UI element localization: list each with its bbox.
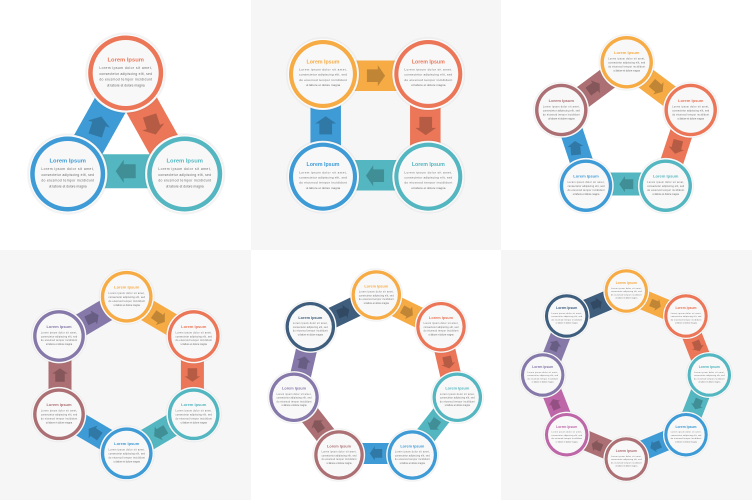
circle: navy xyxy=(284,300,337,353)
circle: purple: do eiusmod tempor incididunt xyxy=(277,400,312,403)
circle: magenta: consectetur adipiscing elit, sed xyxy=(551,434,582,437)
circle: red: Lorem Ipsum xyxy=(429,316,454,320)
circle: blue: ut labore et dolore magna xyxy=(400,462,426,465)
circle: red: Lorem Ipsum xyxy=(107,57,144,63)
circle: blue xyxy=(287,141,359,213)
circle: red: do eiusmod tempor incididunt xyxy=(671,318,702,321)
circle: blue xyxy=(386,429,439,481)
connector: blue xyxy=(61,413,127,452)
circle: mauve: Lorem ipsum dolor sit amet, xyxy=(543,105,580,108)
circle: red: ut labore et dolore magna xyxy=(107,83,145,87)
circle: navy: ut labore et dolore magna xyxy=(298,333,324,336)
circle: navy: do eiusmod tempor incididunt xyxy=(551,318,582,321)
circle: blue: do eiusmod tempor incididunt xyxy=(671,437,702,440)
circle: purple xyxy=(32,309,86,363)
circle: mauve: consectetur adipiscing elit, sed xyxy=(322,454,357,457)
circle: red: consectetur adipiscing elit, sed xyxy=(404,73,452,77)
circle: red: do eiusmod tempor incididunt xyxy=(176,339,212,342)
circle: teal: Lorem Ipsum xyxy=(412,162,445,168)
circle: orange: Lorem Ipsum xyxy=(614,50,640,55)
connector: purple xyxy=(295,328,312,397)
circle: orange: consectetur adipiscing elit, sed xyxy=(611,290,642,293)
circle: teal: do eiusmod tempor incididunt xyxy=(158,179,211,183)
circle: teal: Lorem Ipsum xyxy=(445,387,470,391)
circle: red: consectetur adipiscing elit, sed xyxy=(176,335,213,338)
circle: red xyxy=(663,82,718,138)
circle: red xyxy=(86,33,165,113)
circle: orange: ut labore et dolore magna xyxy=(364,302,390,305)
circle: teal xyxy=(145,134,224,214)
circle: mauve: Lorem Ipsum xyxy=(327,444,352,448)
circle: magenta: Lorem Ipsum xyxy=(556,425,577,429)
circle: teal: consectetur adipiscing elit, sed xyxy=(404,175,452,179)
circle: teal: Lorem ipsum dolor sit amet, xyxy=(440,393,475,396)
connector: red xyxy=(685,317,708,375)
connector: mauve xyxy=(568,433,626,457)
connector: red xyxy=(126,77,178,171)
circle: mauve: Lorem ipsum dolor sit amet, xyxy=(322,450,357,453)
circle: teal: do eiusmod tempor incididunt xyxy=(404,181,452,185)
circle: mauve: ut labore et dolore magna xyxy=(548,117,575,120)
circle: navy: Lorem Ipsum xyxy=(298,316,323,320)
circle: red: do eiusmod tempor incididunt xyxy=(99,78,152,82)
connector: purple xyxy=(545,317,568,375)
circle: red: Lorem ipsum dolor sit amet, xyxy=(424,322,459,325)
circle: mauve: Lorem Ipsum xyxy=(616,449,637,453)
circle: red: ut labore et dolore magna xyxy=(675,322,698,325)
circle: blue: Lorem ipsum dolor sit amet, xyxy=(41,167,94,171)
circle: purple: ut labore et dolore magna xyxy=(281,404,307,407)
circle: red: do eiusmod tempor incididunt xyxy=(424,330,459,333)
connector: teal xyxy=(74,160,178,183)
circle: mauve: do eiusmod tempor incididunt xyxy=(611,461,642,464)
circle: red: ut labore et dolore magna xyxy=(677,117,705,120)
circle: mauve xyxy=(313,429,365,481)
circle: orange: Lorem ipsum dolor sit amet, xyxy=(611,287,642,290)
circle: orange: Lorem Ipsum xyxy=(307,59,340,65)
circle: mauve: consectetur adipiscing elit, sed xyxy=(543,109,580,112)
connector: orange xyxy=(626,293,685,317)
circle: blue: consectetur adipiscing elit, sed xyxy=(568,185,605,188)
circle: blue: consectetur adipiscing elit, sed xyxy=(109,453,146,456)
connector: magenta xyxy=(545,375,568,433)
circle: blue: Lorem ipsum dolor sit amet, xyxy=(299,170,347,174)
connector: purple xyxy=(61,298,127,337)
connector: orange xyxy=(127,298,192,337)
circle: blue: consectetur adipiscing elit, sed xyxy=(671,434,701,437)
panel: seven-step cycle xyxy=(268,269,484,481)
circle: orange xyxy=(603,268,649,314)
circle: blue: do eiusmod tempor incididunt xyxy=(41,179,94,183)
circle: orange: consectetur adipiscing elit, sed xyxy=(109,296,146,299)
connector: navy xyxy=(312,297,376,328)
circle: teal: Lorem ipsum dolor sit amet, xyxy=(647,181,684,184)
circle: purple: consectetur adipiscing elit, sed xyxy=(527,374,558,377)
circle: red: ut labore et dolore magna xyxy=(411,83,446,87)
circle: teal: Lorem ipsum dolor sit amet, xyxy=(404,170,452,174)
circle: blue: Lorem Ipsum xyxy=(114,441,140,446)
connector: teal xyxy=(412,397,456,454)
circle: mauve xyxy=(32,387,86,442)
panel: three-step cycle xyxy=(28,33,224,214)
circle: teal: consectetur adipiscing elit, sed xyxy=(647,185,685,188)
connector: orange xyxy=(326,65,425,86)
circle: orange xyxy=(99,269,154,324)
circle: navy: Lorem ipsum dolor sit amet, xyxy=(551,312,582,315)
circle: teal: ut labore et dolore magna xyxy=(698,381,721,384)
circle: orange xyxy=(350,269,403,321)
circle: orange: ut labore et dolore magna xyxy=(114,304,141,307)
circle: teal: do eiusmod tempor incididunt xyxy=(176,418,212,421)
circle: teal xyxy=(686,352,732,398)
circle: mauve: consectetur adipiscing elit, sed xyxy=(611,458,642,461)
circle: blue: ut labore et dolore magna xyxy=(114,460,141,463)
circle: red: Lorem ipsum dolor sit amet, xyxy=(176,331,212,334)
circle: magenta xyxy=(544,412,590,458)
circle: red: Lorem Ipsum xyxy=(678,98,704,103)
circle: mauve: Lorem Ipsum xyxy=(46,402,72,407)
circle: teal: do eiusmod tempor incididunt xyxy=(647,189,684,192)
circle: red: consectetur adipiscing elit, sed xyxy=(424,326,459,329)
circle: blue xyxy=(558,158,614,213)
circle: red xyxy=(392,38,464,110)
circle: teal: Lorem Ipsum xyxy=(699,365,720,369)
circle: teal: consectetur adipiscing elit, sed xyxy=(694,374,725,377)
connector: mauve xyxy=(52,337,68,413)
circle: red: do eiusmod tempor incididunt xyxy=(672,113,709,116)
circle: mauve: do eiusmod tempor incididunt xyxy=(543,113,580,116)
circle: red: Lorem ipsum dolor sit amet, xyxy=(672,105,709,108)
circle: orange: ut labore et dolore magna xyxy=(615,297,638,300)
circle: orange: do eiusmod tempor incididunt xyxy=(359,298,394,301)
circle: purple: Lorem ipsum dolor sit amet, xyxy=(527,371,558,374)
circle: red xyxy=(415,300,467,353)
panel: four-step cycle xyxy=(287,38,464,213)
circle: navy: consectetur adipiscing elit, sed xyxy=(551,315,582,318)
circle: red: Lorem Ipsum xyxy=(675,306,697,310)
circle: magenta: Lorem ipsum dolor sit amet, xyxy=(551,430,582,433)
circle: orange: consectetur adipiscing elit, sed xyxy=(608,62,646,65)
circle: navy: consectetur adipiscing elit, sed xyxy=(293,326,328,329)
connector: red xyxy=(664,111,689,184)
circle: blue: Lorem ipsum dolor sit amet, xyxy=(568,181,605,184)
circle: teal: consectetur adipiscing elit, sed xyxy=(176,414,213,417)
circle: orange: Lorem ipsum dolor sit amet, xyxy=(299,68,347,72)
circle: navy: Lorem ipsum dolor sit amet, xyxy=(293,322,328,325)
circle: navy xyxy=(544,293,590,339)
circle: orange: do eiusmod tempor incididunt xyxy=(109,300,145,303)
circle: orange: do eiusmod tempor incididunt xyxy=(299,78,347,82)
circle: orange: Lorem Ipsum xyxy=(364,284,389,288)
circle: teal: do eiusmod tempor incididunt xyxy=(440,400,475,403)
circle: blue: Lorem Ipsum xyxy=(49,158,86,164)
circle: blue xyxy=(28,134,107,214)
circle: purple xyxy=(268,371,320,424)
connector: mauve xyxy=(296,397,340,454)
circle: red: Lorem ipsum dolor sit amet, xyxy=(671,312,702,315)
circle: blue: do eiusmod tempor incididunt xyxy=(109,457,145,460)
circle: purple: Lorem ipsum dolor sit amet, xyxy=(41,331,78,334)
circle: blue: consectetur adipiscing elit, sed xyxy=(299,175,347,179)
connector: red xyxy=(185,337,200,413)
circle: purple: consectetur adipiscing elit, sed xyxy=(41,335,78,338)
circle: navy: Lorem Ipsum xyxy=(556,306,577,310)
circle: purple: do eiusmod tempor incididunt xyxy=(41,339,78,342)
circle: blue: ut labore et dolore magna xyxy=(573,193,600,196)
circle: teal: Lorem ipsum dolor sit amet, xyxy=(158,167,211,171)
circle: purple: Lorem Ipsum xyxy=(46,324,72,329)
circle: blue: consectetur adipiscing elit, sed xyxy=(395,454,430,457)
circle: purple xyxy=(520,352,566,398)
connector: teal xyxy=(589,176,664,192)
circle: red: consectetur adipiscing elit, sed xyxy=(672,109,710,112)
circle: magenta: do eiusmod tempor incididunt xyxy=(551,437,582,440)
circle: blue: Lorem ipsum dolor sit amet, xyxy=(671,430,702,433)
circle: blue: ut labore et dolore magna xyxy=(49,184,87,188)
connector: blue xyxy=(626,433,685,457)
connector: teal xyxy=(127,413,192,452)
circle: blue: Lorem Ipsum xyxy=(573,174,599,179)
panel: five-step cycle xyxy=(534,35,718,213)
circle: orange xyxy=(599,35,654,90)
circle: red: Lorem Ipsum xyxy=(412,59,445,65)
circle: teal: Lorem Ipsum xyxy=(181,402,207,407)
circle: orange: do eiusmod tempor incididunt xyxy=(608,66,645,69)
circle: mauve: ut labore et dolore magna xyxy=(46,421,73,424)
connector: orange xyxy=(376,297,440,328)
circle: blue xyxy=(99,426,154,481)
circle: red: ut labore et dolore magna xyxy=(181,343,208,346)
circle: red: do eiusmod tempor incididunt xyxy=(404,78,452,82)
circle: teal: consectetur adipiscing elit, sed xyxy=(158,173,211,177)
circle: red xyxy=(166,309,221,363)
circle: blue: ut labore et dolore magna xyxy=(675,440,698,443)
circle: blue: Lorem ipsum dolor sit amet, xyxy=(395,450,430,453)
connector: teal xyxy=(685,375,708,433)
circle: teal: ut labore et dolore magna xyxy=(166,184,204,188)
circle: teal: ut labore et dolore magna xyxy=(411,186,446,190)
circle: orange: consectetur adipiscing elit, sed xyxy=(299,73,347,77)
circle: blue: Lorem Ipsum xyxy=(400,444,425,448)
circle: red xyxy=(663,293,709,339)
circle: orange: Lorem ipsum dolor sit amet, xyxy=(608,58,645,61)
circle: purple: ut labore et dolore magna xyxy=(46,343,73,346)
circle: teal: ut labore et dolore magna xyxy=(652,193,680,196)
circle: red: Lorem Ipsum xyxy=(181,324,207,329)
circle: mauve: do eiusmod tempor incididunt xyxy=(41,418,78,421)
circle: red: ut labore et dolore magna xyxy=(428,333,454,336)
circle: teal: ut labore et dolore magna xyxy=(445,404,471,407)
connector: red xyxy=(440,328,456,397)
circle: teal xyxy=(166,387,221,442)
circle: purple: do eiusmod tempor incididunt xyxy=(527,377,558,380)
circle: orange: ut labore et dolore magna xyxy=(306,83,341,87)
circle: purple: Lorem Ipsum xyxy=(282,387,307,391)
circle: magenta: ut labore et dolore magna xyxy=(556,440,579,443)
circle: teal: consectetur adipiscing elit, sed xyxy=(440,397,475,400)
circle: mauve: ut labore et dolore magna xyxy=(615,465,638,468)
circle: orange: Lorem Ipsum xyxy=(114,285,140,290)
circle: orange: Lorem Ipsum xyxy=(616,281,637,285)
circle: teal xyxy=(431,371,484,424)
circle: teal xyxy=(638,158,693,213)
circle: blue: Lorem ipsum dolor sit amet, xyxy=(109,449,145,452)
circle: mauve: ut labore et dolore magna xyxy=(326,462,352,465)
circle: orange: Lorem ipsum dolor sit amet, xyxy=(359,290,394,293)
circle: mauve: Lorem Ipsum xyxy=(549,98,574,103)
circle: mauve xyxy=(603,436,649,482)
connector: red xyxy=(415,76,436,175)
connector: orange xyxy=(627,64,689,111)
connector: blue xyxy=(315,76,336,175)
panel: eight-step cycle xyxy=(520,268,732,482)
connector: navy xyxy=(568,293,626,317)
circle: red: consectetur adipiscing elit, sed xyxy=(671,315,701,318)
circle: orange: Lorem ipsum dolor sit amet, xyxy=(109,292,145,295)
circle: red: Lorem ipsum dolor sit amet, xyxy=(404,68,452,72)
circle: blue: do eiusmod tempor incididunt xyxy=(395,458,430,461)
circle: purple: consectetur adipiscing elit, sed xyxy=(277,397,312,400)
circle: purple: Lorem ipsum dolor sit amet, xyxy=(277,393,312,396)
circle: blue xyxy=(663,412,709,458)
circle: teal: Lorem Ipsum xyxy=(166,158,203,164)
circle: orange: do eiusmod tempor incididunt xyxy=(611,293,642,296)
circle: mauve xyxy=(534,82,589,138)
panel: six-step cycle xyxy=(32,269,221,481)
circle: purple: ut labore et dolore magna xyxy=(532,381,555,384)
circle: blue: consectetur adipiscing elit, sed xyxy=(41,173,94,177)
circle: mauve: consectetur adipiscing elit, sed xyxy=(41,414,78,417)
circle: blue: do eiusmod tempor incididunt xyxy=(299,181,347,185)
circle: teal: do eiusmod tempor incididunt xyxy=(694,377,725,380)
circle: blue: Lorem Ipsum xyxy=(307,162,340,168)
circle: orange: ut labore et dolore magna xyxy=(613,70,641,73)
circle: mauve: Lorem ipsum dolor sit amet, xyxy=(41,410,78,413)
connector: teal xyxy=(326,165,425,186)
circle: red: Lorem ipsum dolor sit amet, xyxy=(99,66,152,70)
circle: blue: ut labore et dolore magna xyxy=(306,186,341,190)
circle: blue: do eiusmod tempor incididunt xyxy=(568,189,605,192)
circle: red: consectetur adipiscing elit, sed xyxy=(99,72,152,76)
connector: mauve xyxy=(565,64,627,111)
circle: teal: Lorem ipsum dolor sit amet, xyxy=(694,371,725,374)
circle: orange: consectetur adipiscing elit, sed xyxy=(359,294,394,297)
circle: navy: do eiusmod tempor incididunt xyxy=(293,330,328,333)
circle: mauve: Lorem ipsum dolor sit amet, xyxy=(611,455,642,458)
circle: teal: ut labore et dolore magna xyxy=(181,421,208,424)
circle: teal: Lorem Ipsum xyxy=(653,174,679,179)
circle: teal: Lorem ipsum dolor sit amet, xyxy=(176,410,212,413)
circle: orange xyxy=(287,38,359,110)
connector: blue xyxy=(74,77,126,171)
connector: blue xyxy=(565,111,589,184)
circle: purple: Lorem Ipsum xyxy=(532,365,553,369)
circle: navy: ut labore et dolore magna xyxy=(556,322,579,325)
circle: teal xyxy=(392,141,464,213)
circle: mauve: do eiusmod tempor incididunt xyxy=(322,458,357,461)
connector: blue xyxy=(340,446,412,461)
circle: blue: Lorem Ipsum xyxy=(675,425,697,429)
